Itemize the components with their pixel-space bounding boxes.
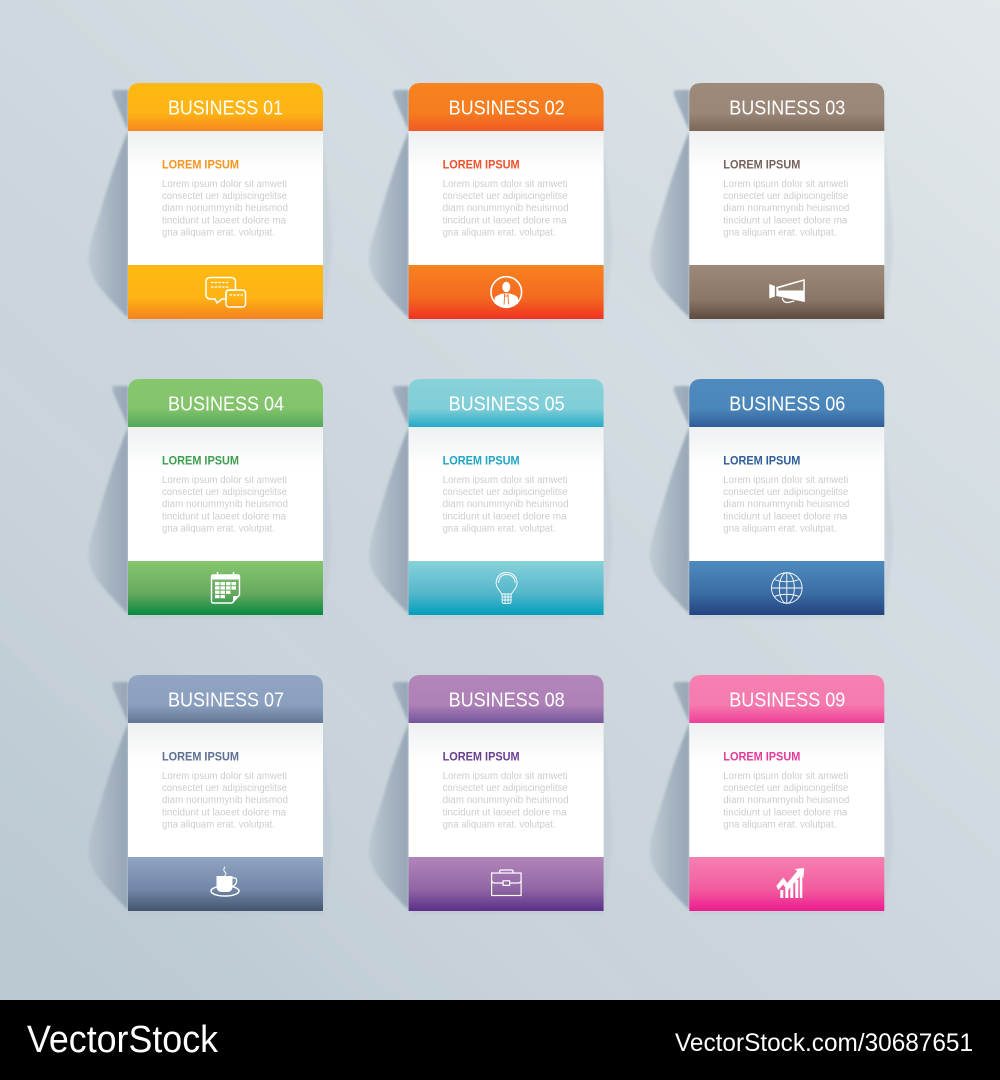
paragraph 09: tincidunt ut laoeet dolore ma	[723, 808, 848, 818]
subheading 05: LOREM IPSUM	[443, 454, 520, 468]
card: business 04	[89, 379, 332, 619]
header band 06	[689, 379, 884, 427]
white body 06	[689, 427, 884, 561]
header band 07	[128, 675, 323, 723]
white body 02	[409, 131, 604, 265]
white body 04	[128, 427, 323, 561]
card shadow 03	[650, 90, 893, 323]
paragraph 07: diam nonummynib heuismod	[162, 795, 288, 806]
paragraph 03	[723, 179, 849, 238]
footer band 07	[128, 857, 323, 911]
paragraph 06	[723, 475, 849, 534]
subheading 01: LOREM IPSUM	[162, 158, 239, 172]
white body 09	[689, 723, 884, 857]
paragraph 03: Lorem ipsum dolor sit amweti	[723, 179, 848, 190]
footer band 05	[409, 561, 604, 615]
paragraph 09: consectet uer adipiscingelitse	[723, 783, 849, 794]
paragraph 08	[443, 771, 569, 830]
paragraph 08: consectet uer adipiscingelitse	[443, 783, 568, 794]
heading 01: BUSINESS 01	[168, 98, 283, 120]
card: business 03	[650, 83, 893, 323]
icon: globe	[772, 573, 802, 603]
heading 06: BUSINESS 06	[729, 394, 845, 416]
icon: chat bubbles	[206, 278, 246, 307]
paragraph 03: diam nonummynib heuismod	[723, 203, 849, 214]
icon: briefcase	[492, 870, 521, 896]
subheading 03: LOREM IPSUM	[723, 158, 800, 172]
header band 04	[128, 379, 323, 427]
stock url: VectorStock.com/30687651	[675, 1029, 973, 1057]
footer bar	[0, 1000, 1000, 1080]
paragraph 01	[162, 179, 288, 238]
paragraph 06: consectet uer adipiscingelitse	[723, 487, 849, 498]
paragraph 06: diam nonummynib heuismod	[723, 499, 849, 510]
paragraph 06: tincidunt ut laoeet dolore ma	[723, 512, 848, 522]
subheading 09: LOREM IPSUM	[723, 750, 800, 764]
card: business 09	[650, 675, 893, 915]
white body 07	[128, 723, 323, 857]
paragraph 02: gna aliquam erat. volutpat.	[443, 228, 556, 238]
paragraph 09: Lorem ipsum dolor sit amweti	[723, 771, 848, 782]
header band 01	[128, 83, 323, 131]
heading 03: BUSINESS 03	[729, 98, 845, 120]
card shadow 02	[369, 90, 613, 323]
paragraph 05: diam nonummynib heuismod	[443, 499, 569, 510]
paragraph 03: gna aliquam erat. volutpat.	[723, 228, 836, 238]
white body 03	[689, 131, 884, 265]
card shadow 06	[650, 386, 893, 619]
card shadow 01	[89, 90, 332, 323]
header band 08	[409, 675, 604, 723]
paragraph 03: consectet uer adipiscingelitse	[723, 191, 849, 202]
footer band 04	[128, 561, 323, 615]
paragraph 05: Lorem ipsum dolor sit amweti	[443, 475, 568, 486]
paragraph 01: Lorem ipsum dolor sit amweti	[162, 179, 287, 190]
heading 08: BUSINESS 08	[449, 690, 565, 712]
paragraph 02: diam nonummynib heuismod	[443, 203, 569, 214]
header band 02	[409, 83, 604, 131]
paragraph 04: gna aliquam erat. volutpat.	[162, 524, 275, 534]
subheading 07: LOREM IPSUM	[162, 750, 239, 764]
card: business 08	[369, 675, 613, 915]
paragraph 01: tincidunt ut laoeet dolore ma	[162, 216, 286, 226]
card: business 07	[89, 675, 332, 915]
footer band 01	[128, 265, 323, 319]
paragraph 04: tincidunt ut laoeet dolore ma	[162, 512, 286, 522]
icon: coffee cup	[211, 867, 239, 896]
card shadow 04	[89, 386, 332, 619]
paragraph 06: Lorem ipsum dolor sit amweti	[723, 475, 848, 486]
card shadow 05	[369, 386, 613, 619]
icon: light bulb	[496, 572, 517, 604]
paragraph 05: tincidunt ut laoeet dolore ma	[443, 512, 567, 522]
heading 07: BUSINESS 07	[168, 690, 284, 712]
heading 05: BUSINESS 05	[449, 394, 565, 416]
paragraph 01: diam nonummynib heuismod	[162, 203, 288, 214]
card: business 05	[369, 379, 613, 619]
header band 03	[689, 83, 884, 131]
card shadow 09	[650, 682, 893, 915]
paragraph 02: consectet uer adipiscingelitse	[443, 191, 568, 202]
card: business 02	[369, 83, 613, 323]
paragraph 05: gna aliquam erat. volutpat.	[443, 524, 556, 534]
heading 02: BUSINESS 02	[449, 98, 565, 120]
paragraph 07: Lorem ipsum dolor sit amweti	[162, 771, 287, 782]
paragraph 03: tincidunt ut laoeet dolore ma	[723, 216, 848, 226]
paragraph 05: consectet uer adipiscingelitse	[443, 487, 568, 498]
card: business 06	[650, 379, 893, 619]
white body 05	[409, 427, 604, 561]
paragraph 02: tincidunt ut laoeet dolore ma	[443, 216, 567, 226]
icon: growth chart	[776, 868, 804, 898]
footer band 03	[689, 265, 884, 319]
paragraph 08: gna aliquam erat. volutpat.	[443, 820, 556, 830]
heading 09: BUSINESS 09	[729, 690, 845, 712]
subheading 02: LOREM IPSUM	[443, 158, 520, 172]
footer band 08	[409, 857, 604, 911]
card shadow 08	[369, 682, 613, 915]
paragraph 07: tincidunt ut laoeet dolore ma	[162, 808, 286, 818]
header band 09	[689, 675, 884, 723]
paragraph 02	[443, 179, 569, 238]
paragraph 01: gna aliquam erat. volutpat.	[162, 228, 275, 238]
paragraph 07	[162, 771, 288, 830]
paragraph 07: consectet uer adipiscingelitse	[162, 783, 287, 794]
header band 05	[409, 379, 604, 427]
paragraph 02: Lorem ipsum dolor sit amweti	[443, 179, 568, 190]
paragraph 04: diam nonummynib heuismod	[162, 499, 288, 510]
paragraph 09: diam nonummynib heuismod	[723, 795, 849, 806]
heading 04: BUSINESS 04	[168, 394, 284, 416]
card shadow 07	[89, 682, 332, 915]
white body 01	[128, 131, 323, 265]
paragraph 05	[443, 475, 569, 534]
subheading 08: LOREM IPSUM	[443, 750, 520, 764]
paragraph 01: consectet uer adipiscingelitse	[162, 191, 287, 202]
white body 08	[409, 723, 604, 857]
paragraph 04: consectet uer adipiscingelitse	[162, 487, 287, 498]
paragraph 04	[162, 475, 288, 534]
paragraph 07: gna aliquam erat. volutpat.	[162, 820, 275, 830]
subheading 06: LOREM IPSUM	[723, 454, 800, 468]
paragraph 08: Lorem ipsum dolor sit amweti	[443, 771, 568, 782]
icon: megaphone	[769, 279, 805, 303]
paragraph 04: Lorem ipsum dolor sit amweti	[162, 475, 287, 486]
paragraph 09	[723, 771, 849, 830]
footer band 09	[689, 857, 884, 911]
brand wordmark: VectorStock	[27, 1019, 219, 1061]
footer band 06	[689, 561, 884, 615]
icon: calendar	[212, 572, 240, 603]
icon: businessman	[491, 277, 522, 307]
subheading 04: LOREM IPSUM	[162, 454, 239, 468]
paragraph 08: tincidunt ut laoeet dolore ma	[443, 808, 567, 818]
paragraph 09: gna aliquam erat. volutpat.	[723, 820, 836, 830]
paragraph 06: gna aliquam erat. volutpat.	[723, 524, 836, 534]
footer band 02	[409, 265, 604, 319]
paragraph 08: diam nonummynib heuismod	[443, 795, 569, 806]
card: business 01	[89, 83, 332, 323]
